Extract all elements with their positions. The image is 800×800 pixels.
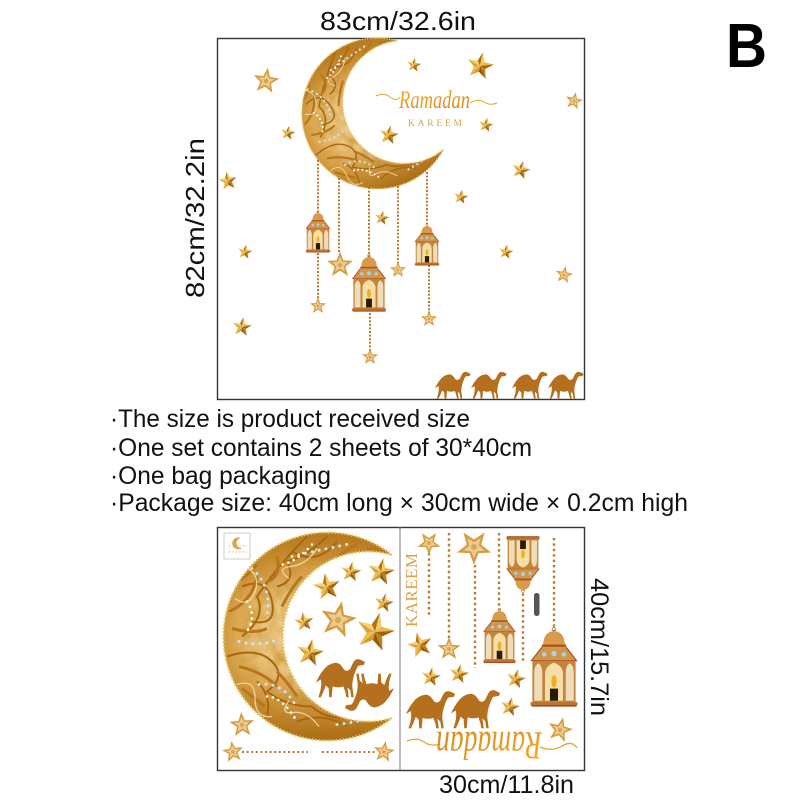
Ramadan Kareem lettering: KAREEM (408, 119, 463, 129)
moon sheet stars (221, 556, 398, 762)
upside-down lantern (506, 536, 540, 593)
small lantern (483, 609, 516, 663)
description text block (110, 405, 688, 517)
panel: assembled decal layout (218, 13, 584, 400)
hanging chains (318, 160, 429, 352)
large lantern (531, 627, 577, 707)
scattered stars (218, 50, 584, 364)
camel row (435, 372, 584, 399)
moon sheet camels (316, 659, 394, 711)
large crescent moon (221, 530, 433, 742)
vertical bead chains (429, 533, 554, 668)
description text block: ·One set contains 2 sheets of 30*40cm (110, 434, 532, 462)
crescent moon (276, 13, 478, 214)
Ramadan Kareem lettering (376, 87, 497, 129)
corner letter B: B (726, 12, 767, 81)
sticker sheet stars (405, 532, 575, 743)
panel: two sticker sheets (218, 527, 584, 770)
horizontal chains (242, 751, 377, 753)
description text block: ·One bag packaging (110, 462, 331, 490)
description text block: ·Package size: 40cm long × 30cm wide × 0.2cm high (110, 489, 688, 517)
lantern right (415, 224, 439, 265)
KAREEM vertical lettering: KAREEM (402, 553, 421, 627)
Ramadan Kareem lettering: Ramadan (398, 87, 470, 114)
thumbnail preview (224, 533, 250, 559)
sheet width dimension label: 30cm/11.8in (439, 771, 574, 799)
lantern left (306, 211, 330, 252)
sheet height dimension label: 40cm/15.7in (585, 578, 613, 716)
top height dimension label: 82cm/32.2in (180, 138, 210, 298)
upside-down Ramadan lettering: Ramadan (436, 723, 543, 768)
description text block: ·The size is product received size (110, 405, 470, 433)
top width dimension label: 83cm/32.6in (320, 6, 476, 36)
sheet serial tag (534, 593, 540, 616)
lantern centre (352, 254, 386, 312)
sticker sheet camels (406, 690, 500, 728)
